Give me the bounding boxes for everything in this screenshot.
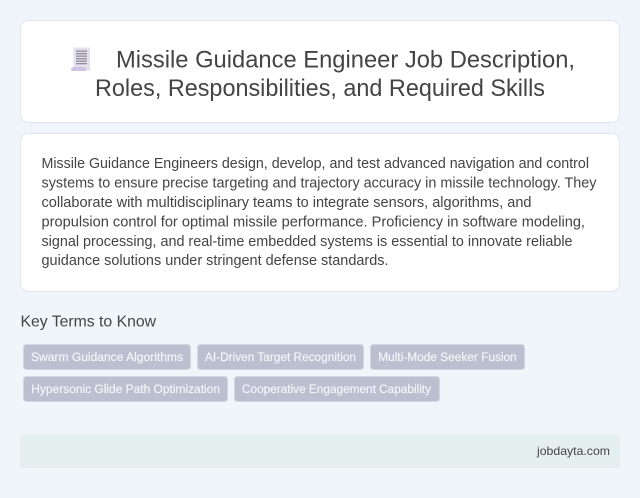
- title heading: Missile Guidance Engineer Job Description,: [116, 46, 575, 73]
- description text block: signal processing, and real-time embedded systems is essential to innovate reliable: [42, 234, 572, 250]
- heading: key terms: Key Terms to Know: [20, 314, 156, 331]
- title heading: Roles, Responsibilities, and Required Skills: [95, 75, 545, 102]
- description text block: collaborate with multidisciplinary teams to integrate sensors, algorithms, and: [42, 195, 532, 211]
- description text block: Missile Guidance Engineers design, develop, and test advanced navigation and control: [42, 156, 589, 172]
- footer bar: [20, 434, 620, 468]
- chip: hypersonic glide path optimization: [24, 376, 228, 402]
- description text block: guidance solutions under stringent defense standards.: [42, 253, 388, 269]
- panel: title card: [20, 20, 620, 122]
- description text block: propulsion control for optimal missile performance. Proficiency in software modeling,: [42, 214, 585, 230]
- chip: AI-driven target recognition: AI-Driven Target Recognition: [205, 350, 356, 364]
- title heading: [95, 46, 575, 102]
- footer site name: jobdayta.com: [536, 444, 610, 458]
- description text block: [42, 156, 597, 269]
- chip: swarm guidance algorithms: Swarm Guidance Algorithms: [31, 350, 183, 364]
- chip: multi-mode seeker fusion: Multi-Mode Seeker Fusion: [378, 350, 517, 364]
- description text block: systems to ensure precise targeting and trajectory accuracy in missile technology. They: [42, 176, 597, 192]
- chip: cooperative engagement capability: [234, 376, 440, 402]
- chip: hypersonic glide path optimization: Hypersonic Glide Path Optimization: [31, 382, 220, 396]
- panel: description card: [20, 134, 620, 292]
- icon: document scroll: [71, 48, 90, 71]
- chip: AI-driven target recognition: [198, 344, 364, 370]
- chip: multi-mode seeker fusion: [370, 344, 524, 370]
- chip: cooperative engagement capability: Cooperative Engagement Capability: [242, 382, 432, 396]
- chip: swarm guidance algorithms: [24, 344, 190, 370]
